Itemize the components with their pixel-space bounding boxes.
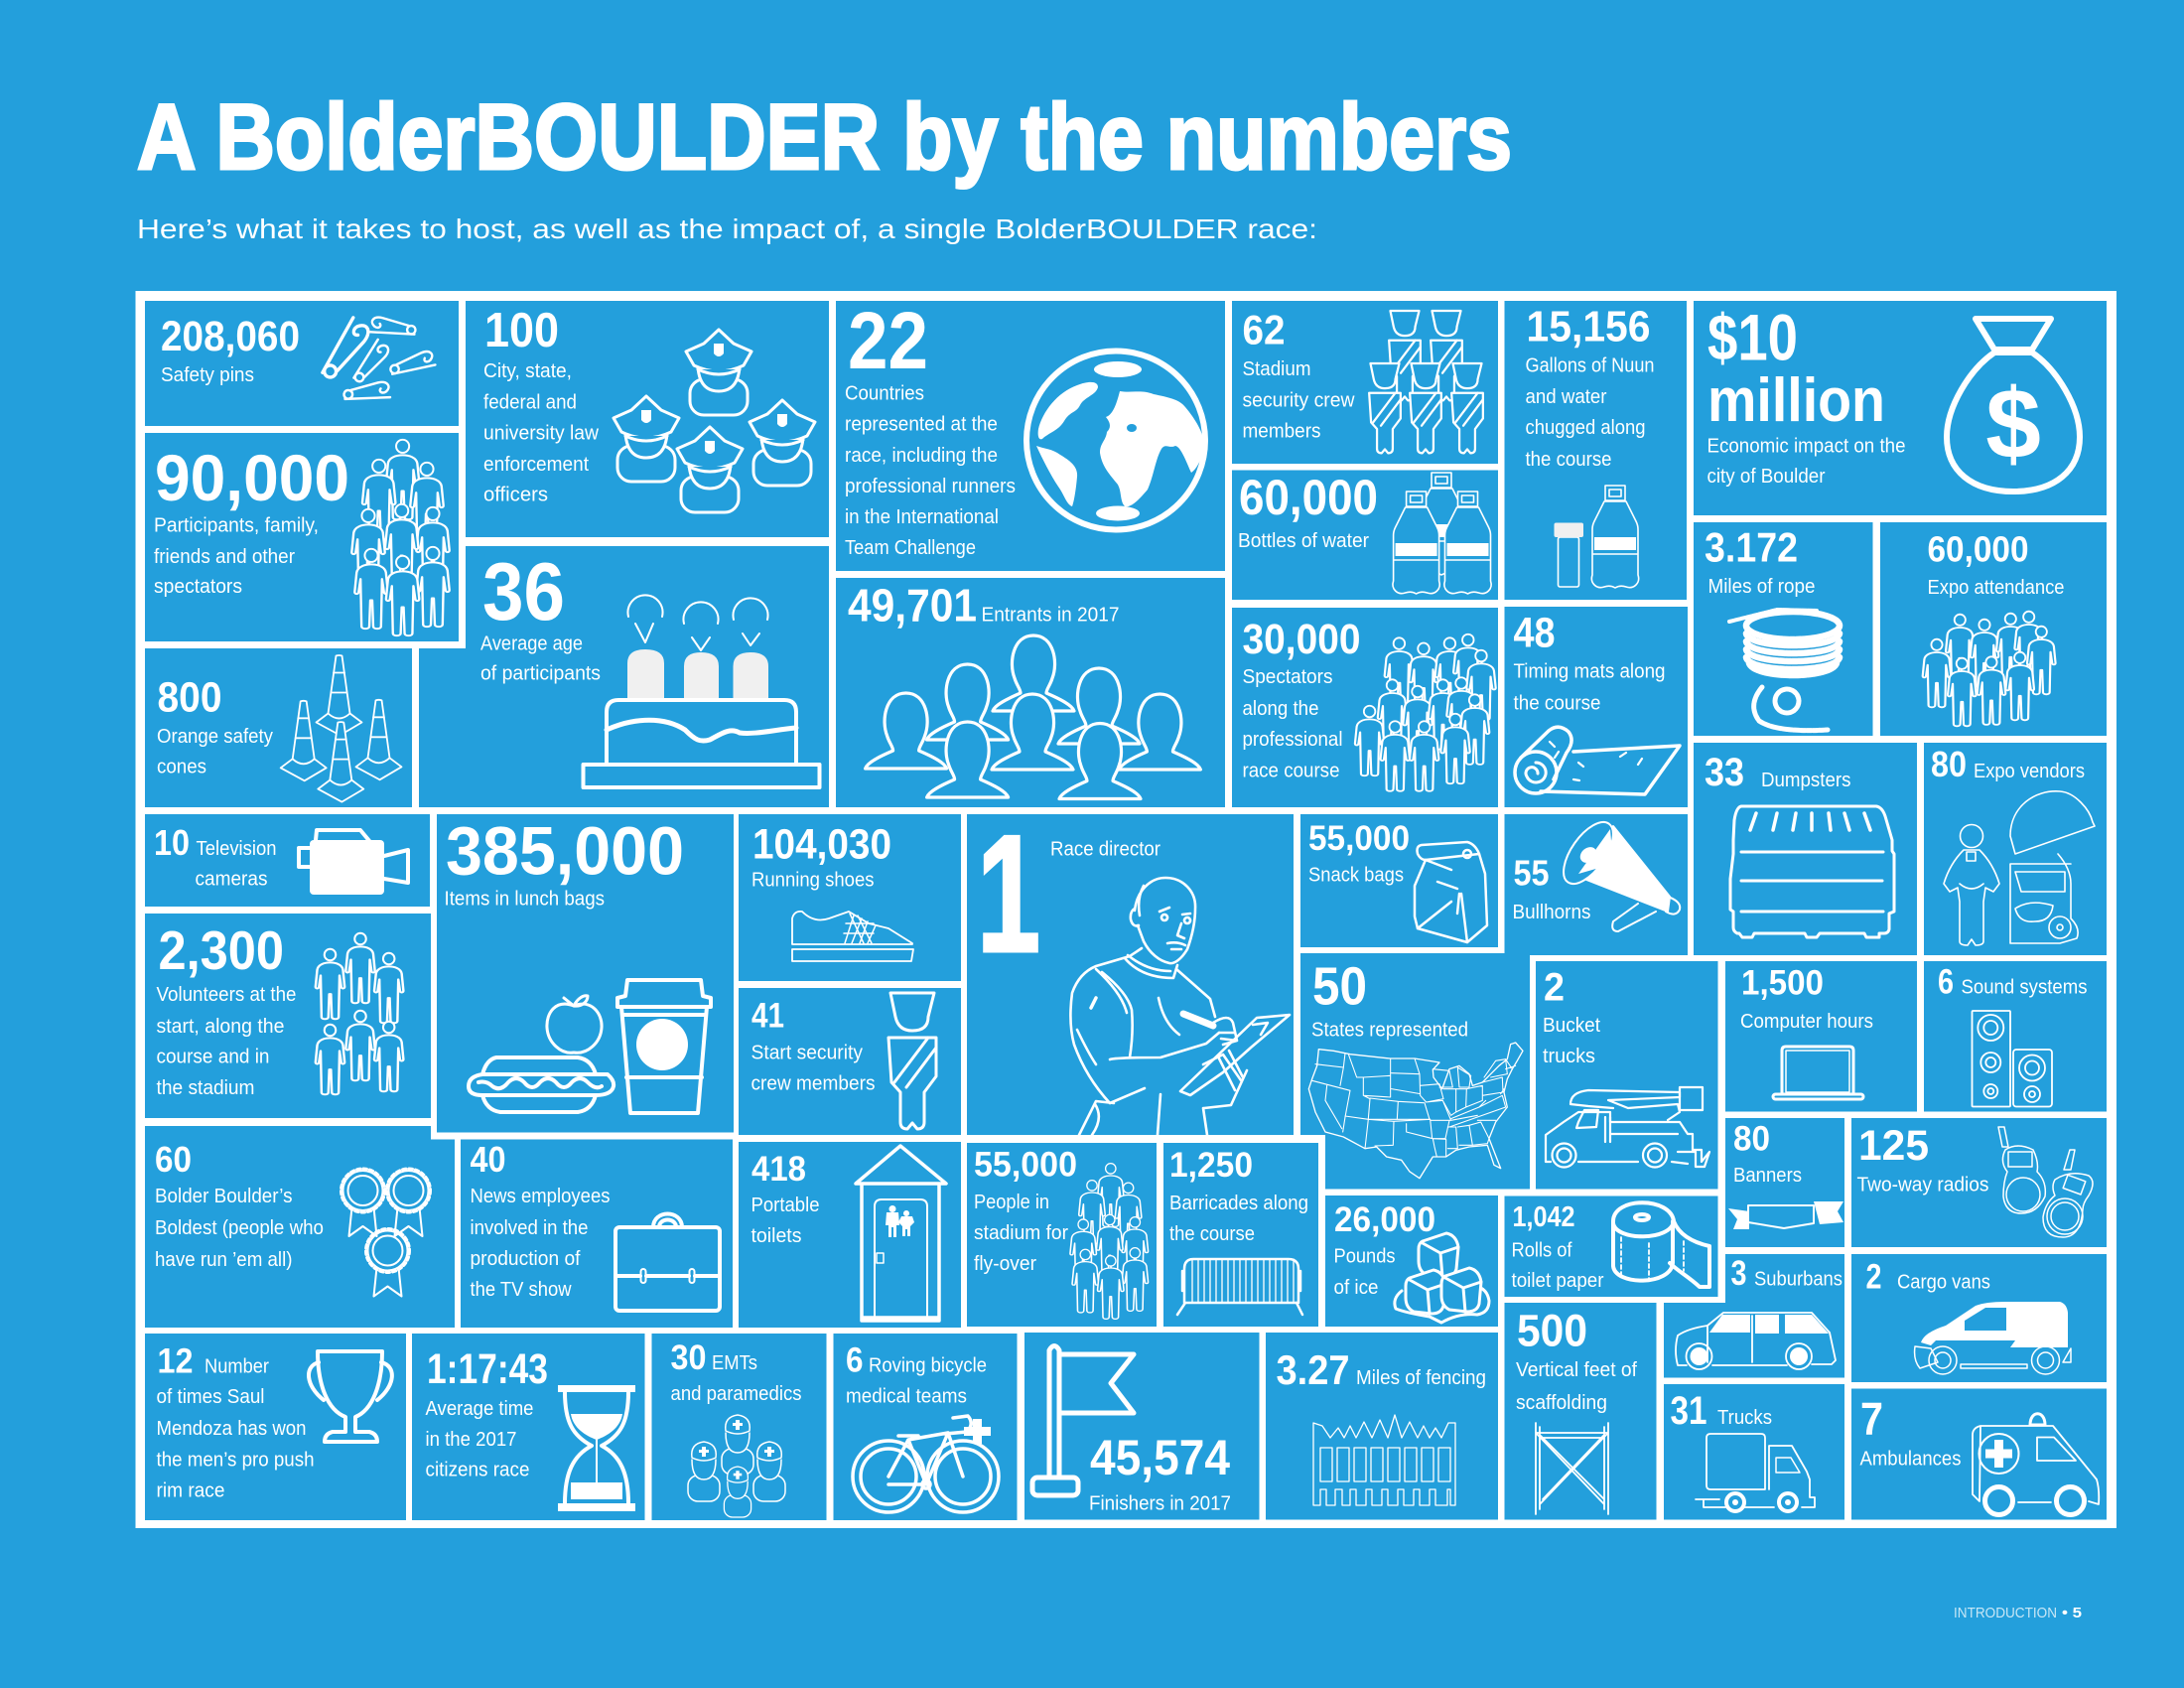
icon: coil of rope	[1729, 610, 1840, 731]
panel: roving bicycle teams	[834, 1334, 1017, 1520]
number: 30,000	[1243, 616, 1360, 663]
panel: race director	[967, 800, 1294, 1135]
icon: police officers	[614, 330, 815, 512]
label: the men’s pro push	[157, 1448, 314, 1472]
panel: computer hours	[1725, 961, 1917, 1112]
icon: crowd of people	[351, 440, 450, 635]
icon: flag	[1032, 1346, 1134, 1495]
panel: dumpsters	[1694, 743, 1917, 955]
icon: award ribbons	[341, 1169, 431, 1297]
label: friends and other	[154, 545, 295, 568]
label: Team Challenge	[845, 536, 976, 559]
number: 41	[751, 997, 784, 1035]
label: Spectators	[1243, 665, 1332, 688]
label: Miles of fencing	[1356, 1366, 1486, 1389]
label: professional runners	[845, 475, 1016, 497]
label: trucks	[1543, 1045, 1595, 1067]
label: Television	[197, 837, 276, 860]
label: Suburbans	[1754, 1267, 1843, 1291]
label: Start security	[751, 1041, 864, 1064]
label: Computer hours	[1740, 1010, 1873, 1033]
label: Finishers in 2017	[1089, 1491, 1231, 1515]
label: race, including the	[845, 444, 998, 467]
panel: television cameras	[145, 814, 430, 907]
label: States represented	[1311, 1019, 1468, 1041]
label: Vertical feet of	[1516, 1358, 1637, 1381]
label: Bucket	[1543, 1014, 1600, 1037]
label: the TV show	[471, 1278, 572, 1301]
number: 418	[751, 1150, 806, 1189]
number: 12	[157, 1342, 193, 1380]
icon: bicycle with medical cross	[853, 1416, 999, 1512]
label: Gallons of Nuun	[1525, 353, 1654, 377]
panel: lunch bag items	[437, 812, 734, 1132]
label: rim race	[157, 1479, 224, 1501]
label: crew members	[751, 1072, 876, 1094]
icon: toilet paper	[1613, 1202, 1709, 1287]
label: citizens race	[425, 1458, 530, 1481]
panel: miles of fencing	[1266, 1333, 1498, 1519]
label: Rolls of	[1511, 1239, 1572, 1261]
label: officers	[483, 483, 548, 506]
label: Bottles of water	[1238, 529, 1369, 552]
panel: news employees	[461, 1139, 733, 1328]
label: Trucks	[1717, 1406, 1772, 1429]
icon: suburban	[1676, 1313, 1836, 1369]
icon: globe	[1026, 352, 1205, 530]
label: Average time	[425, 1397, 534, 1420]
number: 30	[671, 1338, 707, 1377]
label: Average age	[480, 632, 583, 655]
label	[471, 1185, 610, 1301]
panel: EMTs and paramedics	[651, 1334, 826, 1520]
label: in the International	[845, 505, 999, 528]
panel: miles of rope	[1694, 522, 1872, 736]
icon: camera	[299, 830, 408, 895]
label	[154, 514, 319, 598]
panel: Saul Mendoza wins	[145, 1334, 406, 1520]
label	[157, 1354, 314, 1501]
number: 1:17:43	[427, 1345, 548, 1393]
number: 208,060	[161, 313, 300, 360]
icon: nurses	[688, 1415, 785, 1517]
panel: two-way radios	[1851, 1118, 2107, 1247]
label: Volunteers at the	[157, 983, 296, 1006]
icon: running shoe	[792, 912, 913, 961]
label: Economic impact on the	[1707, 435, 1906, 457]
label	[1243, 665, 1342, 782]
number: 40	[471, 1139, 506, 1180]
panel: stadium security	[1232, 301, 1498, 464]
label	[157, 725, 274, 778]
number: 90,000	[155, 441, 349, 514]
icon: crowd	[1923, 612, 2056, 726]
number: 2	[1866, 1257, 1882, 1297]
label: toilets	[751, 1224, 802, 1247]
number: 55	[1513, 852, 1549, 894]
icon: speakers	[1972, 1011, 2052, 1106]
icon: dumpster	[1730, 806, 1894, 937]
number: 800	[157, 673, 222, 721]
icon: map of the United States	[1308, 1043, 1523, 1179]
number: 80	[1733, 1120, 1770, 1158]
label: EMTs	[712, 1351, 757, 1374]
panel: Bolder Boulder's Boldest	[145, 1126, 455, 1328]
label	[751, 1041, 876, 1094]
label	[974, 1191, 1068, 1275]
number: 50	[1312, 957, 1367, 1017]
icon: barricade	[1177, 1259, 1302, 1315]
number: 1,500	[1741, 963, 1824, 1003]
label: Running shoes	[751, 868, 874, 892]
icon: money bag: $	[1985, 368, 2041, 480]
panel: bullhorns	[1505, 814, 1688, 955]
number: 48	[1513, 610, 1555, 657]
label	[1511, 1239, 1604, 1292]
label: along the	[1243, 697, 1318, 720]
title: A BolderBOULDER by the numbers	[137, 84, 1512, 189]
label: Number	[205, 1354, 269, 1378]
icon: birthday cake	[584, 595, 820, 787]
label: the course	[1513, 691, 1600, 715]
label: People in	[974, 1191, 1049, 1213]
icon: volunteers	[316, 933, 403, 1094]
number: 125	[1858, 1122, 1929, 1170]
label: Participants, family,	[154, 514, 319, 536]
number: 10	[154, 822, 190, 863]
label: course and in	[157, 1045, 270, 1068]
panel: bottles of water	[1232, 470, 1498, 600]
label: Bullhorns	[1513, 901, 1590, 923]
panel: volunteers	[145, 914, 431, 1118]
label: federal and	[483, 391, 577, 413]
label: and paramedics	[671, 1382, 802, 1405]
icon: two-way radios	[1998, 1127, 2093, 1237]
number: 2	[1544, 965, 1565, 1009]
panel: ambulances	[1851, 1388, 2107, 1519]
number: 22	[848, 296, 928, 386]
number: 7	[1860, 1392, 1883, 1444]
icon: money bag	[1947, 319, 2080, 492]
number: 31	[1670, 1389, 1707, 1433]
label	[1525, 353, 1654, 471]
panel: sound systems	[1924, 961, 2107, 1112]
label: Countries	[845, 381, 924, 405]
icon: race director with clipboard	[1070, 878, 1290, 1135]
label: medical teams	[846, 1384, 967, 1408]
label: involved in the	[471, 1216, 588, 1239]
label	[1334, 1245, 1396, 1299]
panel: expo attendance	[1880, 522, 2107, 736]
number: 33	[1705, 751, 1744, 794]
icon: rolled mat	[1515, 727, 1680, 794]
panel: countries	[836, 296, 1225, 571]
label	[846, 1354, 987, 1408]
icon: banner	[1728, 1201, 1843, 1229]
label: Items in lunch bags	[445, 888, 605, 910]
label: production of	[471, 1247, 581, 1270]
number: 36	[482, 545, 565, 637]
label: the course	[1525, 448, 1612, 471]
number: 6	[1938, 963, 1954, 1001]
icon: guard	[888, 993, 936, 1129]
icon: security guards	[1369, 311, 1483, 453]
number: 60	[155, 1139, 192, 1180]
label: Cargo vans	[1897, 1271, 1990, 1293]
panel: rolls of toilet paper	[1505, 1196, 1717, 1297]
panel: spectators 90,000	[145, 433, 459, 641]
panel: cargo vans	[1851, 1254, 2107, 1382]
panel: gallons of Nuun	[1505, 301, 1687, 600]
panel: course spectators	[1232, 608, 1498, 807]
label: have run ’em all)	[155, 1248, 292, 1271]
number: 49,701	[848, 580, 977, 632]
icon: cargo van	[1915, 1302, 2071, 1374]
panel: states represented	[1300, 953, 1530, 1190]
label: members	[1243, 419, 1320, 443]
number: 385,000	[446, 812, 684, 890]
label: Entrants in 2017	[981, 604, 1120, 626]
footer: INTRODUCTION	[1954, 1605, 2057, 1621]
panel: average age	[419, 545, 829, 807]
panel: banners	[1725, 1118, 1844, 1247]
label	[751, 1194, 820, 1247]
panel: timing mats	[1505, 607, 1688, 807]
label: Mendoza has won	[157, 1417, 306, 1440]
label: fly-over	[974, 1252, 1036, 1275]
label: Portable	[751, 1194, 820, 1216]
number: 55,000	[974, 1146, 1077, 1184]
icon: vial and bottle	[1555, 486, 1639, 588]
label: Banners	[1733, 1164, 1802, 1187]
number: 60,000	[1928, 528, 2029, 570]
label: Timing mats along	[1513, 659, 1666, 683]
label: Roving bicycle	[869, 1354, 987, 1376]
label	[480, 632, 601, 685]
label	[157, 983, 296, 1099]
number: 104,030	[752, 820, 891, 868]
label: professional	[1243, 728, 1342, 751]
label: the stadium	[157, 1076, 254, 1099]
number: 62	[1243, 306, 1285, 353]
label: security crew	[1243, 389, 1355, 411]
number: 100	[484, 304, 559, 357]
label	[1707, 435, 1906, 488]
panel: trucks	[1664, 1384, 1844, 1519]
icon: briefcase	[615, 1213, 720, 1311]
icon: portable toilet	[856, 1146, 946, 1321]
panel: barricades	[1163, 1143, 1318, 1327]
label: enforcement	[483, 453, 589, 476]
label	[845, 381, 1016, 559]
number: 60,000	[1239, 470, 1378, 525]
panel: start security	[739, 988, 961, 1135]
number: 1,042	[1513, 1201, 1574, 1233]
number: 6	[846, 1340, 864, 1380]
label: of ice	[1334, 1276, 1378, 1299]
icon: truck	[1696, 1434, 1815, 1511]
icon: hourglass	[558, 1385, 635, 1511]
label	[1243, 357, 1355, 443]
label: race course	[1243, 759, 1340, 782]
number	[1707, 300, 1885, 435]
panel: portable toilets	[739, 1142, 961, 1328]
label	[1513, 659, 1666, 715]
panel: economic impact	[1694, 300, 2107, 515]
label: Miles of rope	[1707, 575, 1815, 598]
subtitle: Here’s what it takes to host, as well as the impact of, a single BolderBOULDER race:	[137, 213, 1317, 244]
label: cameras	[195, 868, 268, 890]
number: 15,156	[1527, 302, 1650, 352]
number: 3.172	[1705, 524, 1798, 570]
label: city of Boulder	[1707, 465, 1826, 488]
label: of times Saul	[157, 1385, 264, 1408]
label: Race director	[1050, 838, 1160, 860]
label: Safety pins	[161, 363, 254, 386]
icon: crowd of heads	[866, 635, 1200, 798]
label: of participants	[480, 661, 601, 685]
icon: fence	[1313, 1415, 1455, 1505]
icon: bullhorn	[1554, 814, 1680, 931]
label: Expo vendors	[1974, 760, 2085, 782]
icon: laptop	[1773, 1047, 1863, 1099]
icon: bucket truck	[1546, 1087, 1709, 1168]
label: and water	[1525, 385, 1607, 408]
label: City, state,	[483, 359, 572, 382]
icon: cones	[281, 655, 401, 802]
label	[671, 1351, 802, 1405]
label: Ambulances	[1860, 1448, 1962, 1470]
icon: trophy	[309, 1351, 392, 1442]
panel: vertical feet of scaffolding	[1505, 1303, 1656, 1519]
icon: paper bag	[1415, 842, 1487, 942]
icon: scaffolding	[1536, 1423, 1608, 1514]
label: represented at the	[845, 413, 998, 435]
number: $10	[1707, 300, 1798, 373]
label: Two-way radios	[1856, 1174, 1989, 1196]
number: 2,300	[159, 919, 284, 981]
number: 45,574	[1090, 1430, 1230, 1485]
number: 1,250	[1169, 1146, 1253, 1185]
label: Barricades along	[1169, 1192, 1308, 1214]
label: Boldest (people who	[155, 1216, 324, 1239]
panel: stadium fly-over	[967, 1143, 1157, 1327]
footer: • 5	[2062, 1605, 2082, 1621]
label	[425, 1397, 534, 1481]
icon: water bottles	[1393, 473, 1491, 594]
label	[1169, 1192, 1308, 1245]
panel: suburbans	[1664, 1254, 1844, 1378]
number: 80	[1931, 744, 1967, 784]
label	[1516, 1358, 1637, 1414]
number: 3	[1731, 1254, 1747, 1293]
number: million	[1707, 366, 1885, 435]
icon: stadium crowd	[1070, 1164, 1149, 1319]
panel: expo vendors	[1924, 743, 2107, 955]
panel: running shoes	[739, 814, 961, 981]
white grid frame	[135, 291, 2116, 1528]
label: toilet paper	[1511, 1269, 1604, 1292]
label	[195, 837, 276, 890]
label: spectators	[154, 575, 242, 598]
icon: ice cubes	[1395, 1233, 1489, 1323]
label: stadium for	[974, 1221, 1068, 1244]
icon: crowd of spectators	[1355, 634, 1496, 791]
label: cones	[157, 755, 206, 778]
label: the course	[1169, 1222, 1255, 1245]
label	[483, 359, 599, 506]
icon: safety pins	[313, 316, 436, 408]
panel: average citizens race time	[412, 1334, 645, 1520]
label: university law	[483, 421, 599, 445]
icon: lunch	[469, 980, 711, 1113]
panel: entrants	[836, 578, 1225, 807]
label: chugged along	[1525, 416, 1646, 439]
label: Orange safety	[157, 725, 274, 748]
label: Bolder Boulder’s	[155, 1185, 292, 1207]
label: Dumpsters	[1761, 769, 1850, 791]
label	[1543, 1014, 1600, 1067]
number: 26,000	[1334, 1200, 1435, 1239]
panel: safety cones	[145, 648, 412, 807]
panel: law enforcement	[466, 301, 829, 537]
label: scaffolding	[1516, 1391, 1607, 1414]
label: Sound systems	[1962, 975, 2087, 999]
panel: safety pins	[145, 301, 459, 426]
icon: ambulance	[1973, 1414, 2099, 1515]
panel: bucket trucks	[1536, 961, 1717, 1190]
label	[155, 1185, 324, 1271]
panel: finishers	[1024, 1333, 1259, 1519]
number: 500	[1517, 1305, 1587, 1356]
label: Expo attendance	[1928, 576, 2065, 599]
number: 55,000	[1308, 819, 1410, 858]
label: in the 2017	[425, 1428, 516, 1451]
icon: vendor with tent	[1944, 791, 2095, 945]
label: Stadium	[1243, 357, 1310, 380]
panel: pounds of ice	[1325, 1196, 1498, 1327]
label: start, along the	[157, 1015, 284, 1038]
label: Pounds	[1334, 1245, 1396, 1267]
number: 1	[977, 800, 1040, 987]
panel: snack bags	[1300, 814, 1498, 947]
number: 3.27	[1277, 1346, 1350, 1393]
label: News employees	[471, 1185, 610, 1207]
label: Snack bags	[1308, 864, 1404, 886]
